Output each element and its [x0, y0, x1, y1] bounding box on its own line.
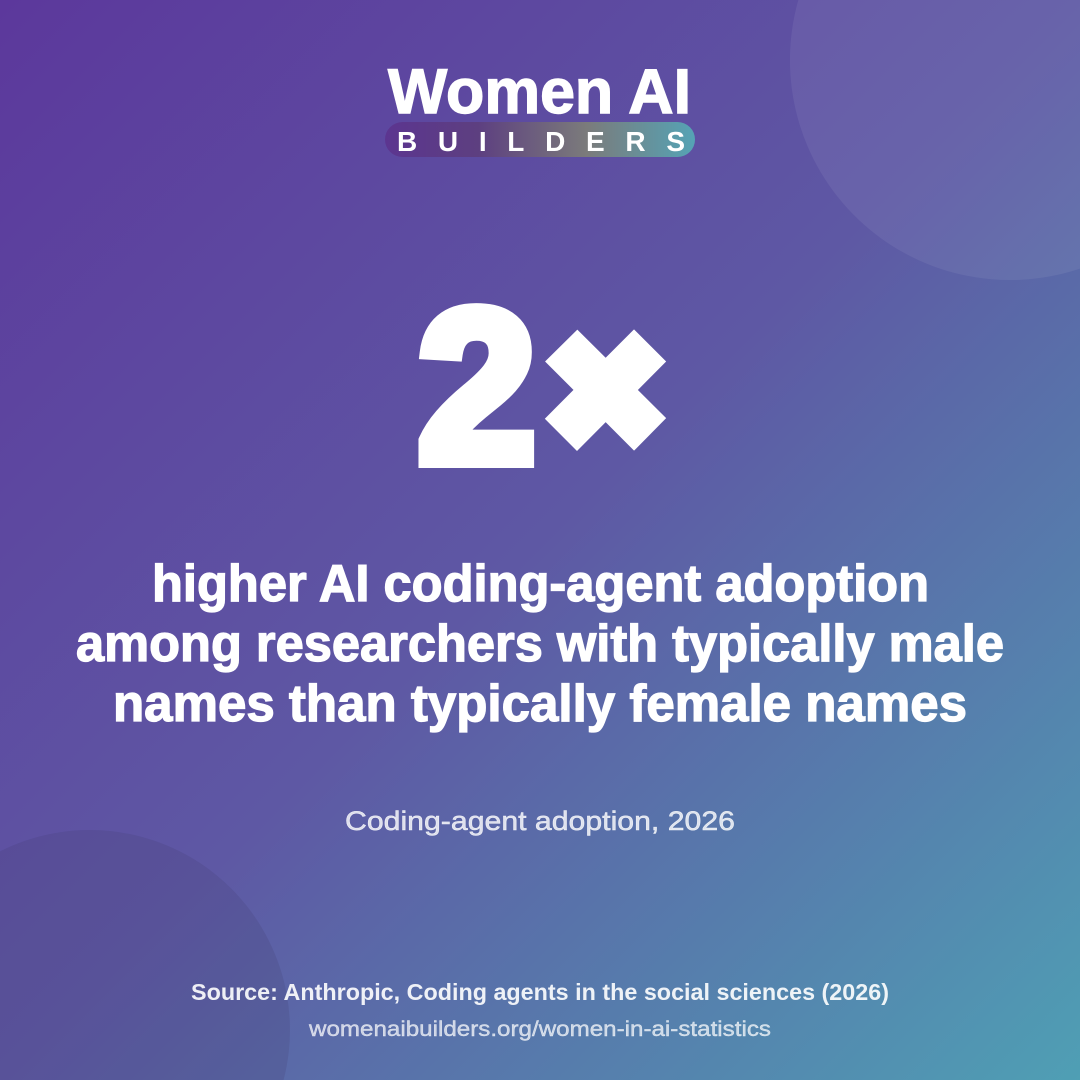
website url: womenaibuilders.org/women-in-ai-statistics — [308, 1018, 771, 1041]
big stat: 2x — [418, 266, 654, 507]
headline: names than typically female names — [113, 675, 967, 733]
decorative circle: bottom left — [0, 830, 290, 1080]
headline — [76, 555, 1004, 733]
logo pill: BUILDERS — [397, 126, 685, 157]
subtitle: Coding-agent adoption, 2026 — [345, 806, 735, 836]
decorative circle: top right — [790, 0, 1080, 280]
headline: higher AI coding-agent adoption — [152, 555, 929, 613]
logo wordmark: Women AI — [388, 57, 691, 127]
logo: Women AI Builders — [385, 57, 695, 157]
big stat: 2x: 2 — [418, 266, 536, 507]
source: Source: Anthropic, Coding agents in the social sciences (2026) — [191, 979, 889, 1005]
big stat: 2x: × — [557, 296, 654, 480]
headline: among researchers with typically male — [76, 615, 1004, 673]
